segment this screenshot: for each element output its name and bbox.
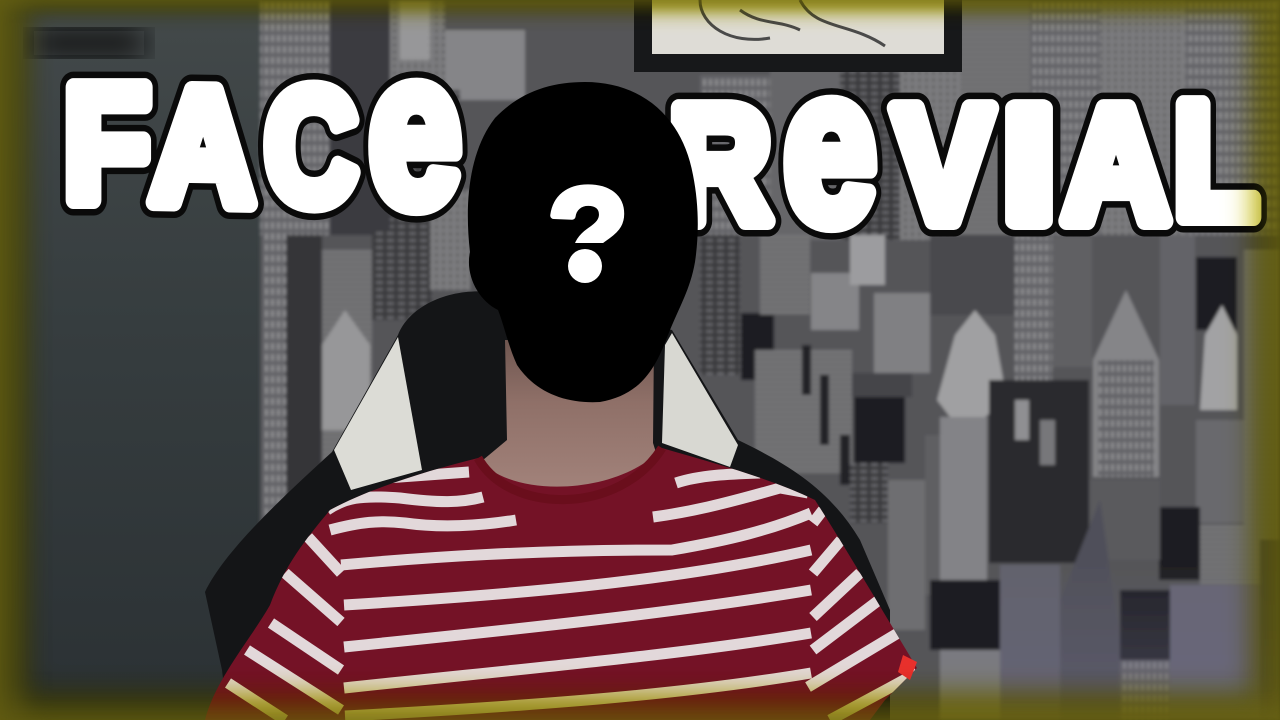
striped t-shirt: [205, 448, 917, 720]
title: REVIAL: V: [894, 74, 992, 257]
title: REVIAL: R: [669, 74, 771, 256]
title: REVIAL: A: [1063, 74, 1169, 257]
title: REVIAL: e: [784, 24, 876, 269]
gaming chair: [205, 291, 890, 720]
title: FACE: F: [64, 53, 150, 235]
title: REVIAL: I: [1003, 73, 1055, 256]
title: FACE: A: [149, 53, 257, 239]
shadow in top left corner: [34, 30, 144, 56]
title: FACE: [64, 7, 461, 252]
title: REVIAL: L: [1174, 70, 1258, 253]
question mark: ?: [548, 161, 628, 308]
title: FACE: e: [369, 7, 461, 252]
title: FACE: C: [265, 56, 357, 239]
title: FACE: e: [369, 7, 461, 252]
title: FACE: A: [149, 53, 257, 239]
head silhouette: [468, 82, 698, 402]
title: REVIAL: [669, 24, 1258, 269]
title: REVIAL: R: [669, 74, 771, 256]
title: REVIAL: I: [1003, 73, 1055, 256]
background: plain dark wall: [0, 0, 262, 720]
title: REVIAL: A: [1063, 74, 1169, 257]
picture frame on wall: [634, 0, 962, 72]
title: REVIAL: L: [1174, 70, 1258, 253]
title: FACE: C: [265, 56, 357, 239]
background: city skyline wallpaper: [260, 0, 1280, 720]
title: FACE: F: [64, 53, 150, 235]
title: REVIAL: e: [784, 24, 876, 269]
title: REVIAL: V: [894, 74, 992, 257]
neck: [483, 340, 659, 518]
